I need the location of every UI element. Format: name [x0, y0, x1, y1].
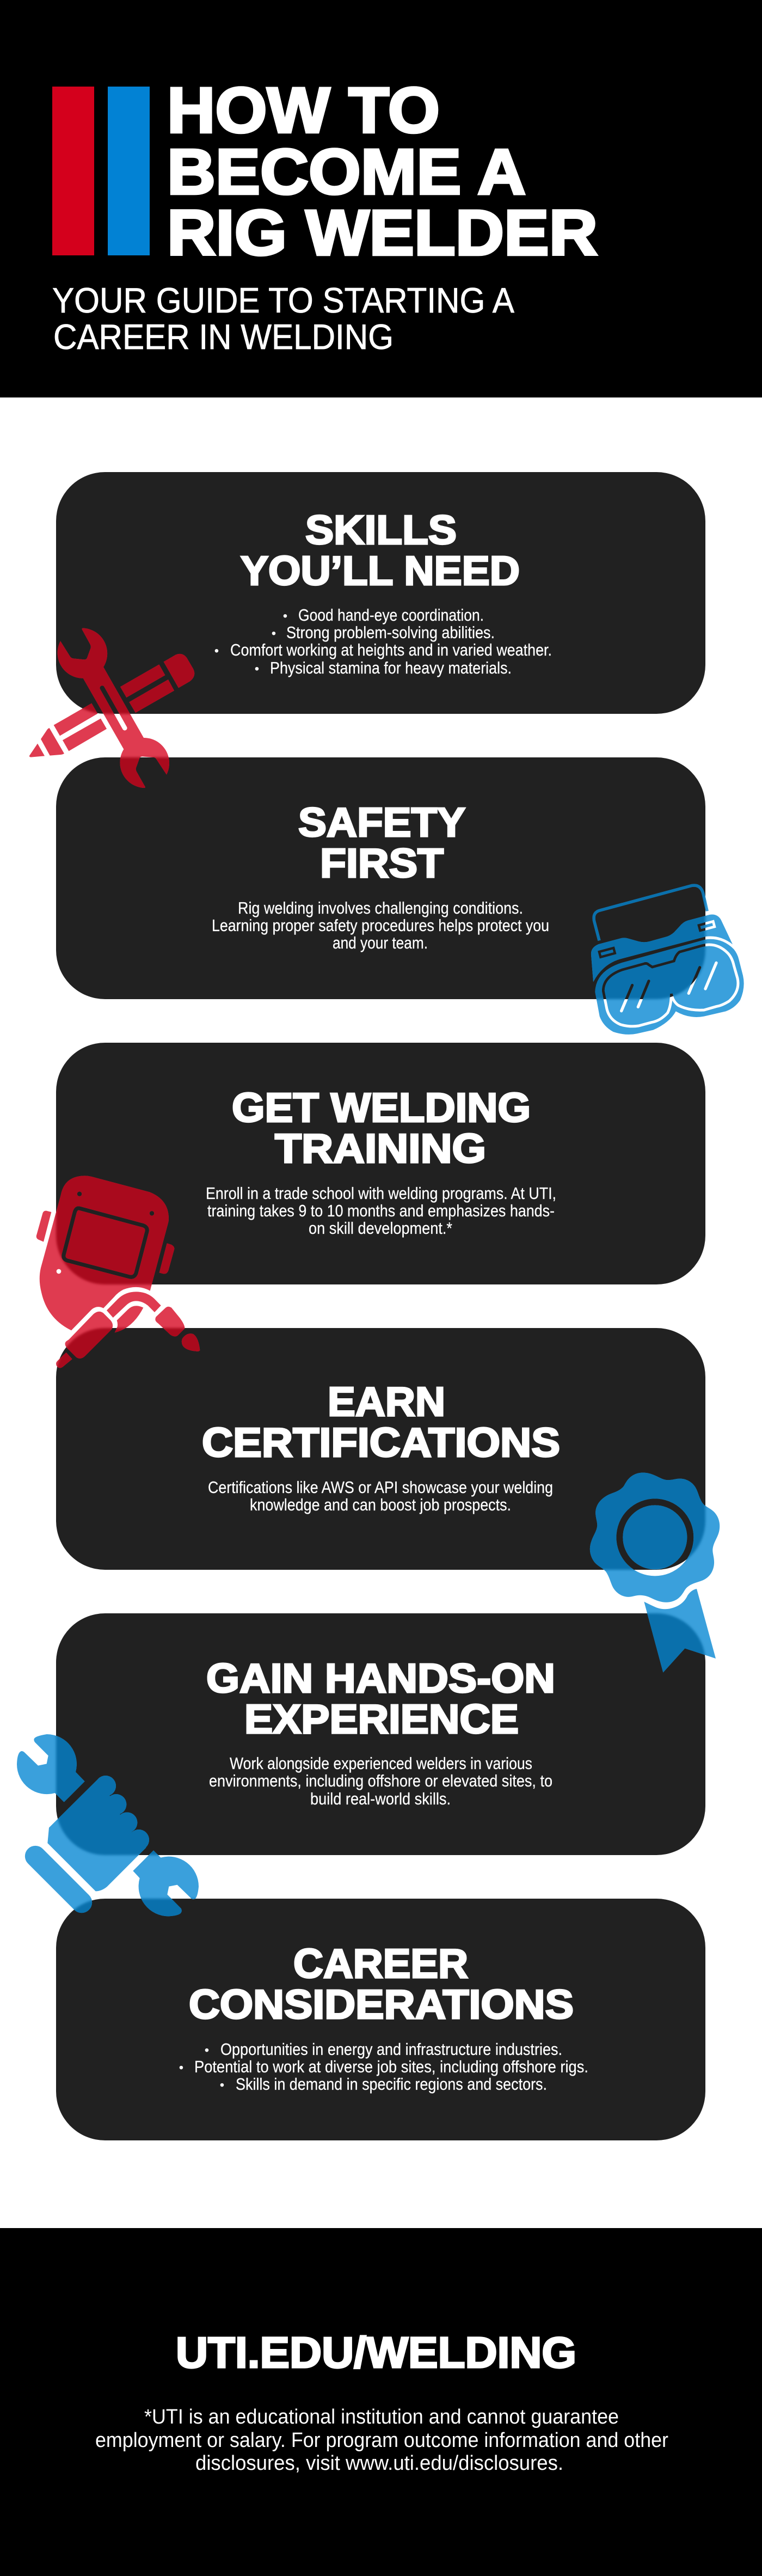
text: skills list: Comfort working at heights and in varied weather. [230, 640, 552, 659]
heading: safety: SAFETY [298, 799, 465, 845]
icon: wrench and pencil [29, 628, 194, 788]
footer panel [0, 2228, 762, 2576]
heading: skills [241, 507, 520, 593]
icon: hand holding wrench [17, 1734, 199, 1916]
heading: experience: GAIN HANDS-ON [206, 1655, 555, 1701]
heading: skills: SKILLS [305, 507, 457, 553]
heading: experience: EXPERIENCE [244, 1696, 519, 1742]
text: career list: Opportunities in energy and infrastructure industries. [220, 2040, 562, 2059]
text: skills list: Physical stamina for heavy materials. [270, 658, 512, 677]
text: career list: Potential to work at diverse job sites, including offshore rigs. [194, 2057, 588, 2076]
text: skills list: • [283, 609, 287, 623]
icon: certification ribbon [590, 1473, 720, 1673]
title: HOW TO [167, 75, 440, 146]
text: certifications body: knowledge and can boost job prospects. [250, 1495, 511, 1514]
heading: safety: FIRST [320, 840, 444, 886]
text: safety body [212, 898, 549, 952]
header panel [0, 0, 762, 397]
subtitle: CAREER IN WELDING [53, 317, 394, 357]
heading: certifications: CERTIFICATIONS [202, 1419, 560, 1465]
text: safety body: Rig welding involves challenging conditions. [238, 898, 523, 917]
panel: earn certifications [56, 1328, 705, 1570]
icon: blue stripe [108, 87, 150, 255]
text: career list: • [220, 2078, 224, 2092]
text: training body [206, 1184, 556, 1238]
title [167, 75, 598, 269]
text: career list: • [179, 2060, 183, 2075]
panel: safety first [56, 757, 705, 999]
text: experience body: Work alongside experienced welders in various [230, 1754, 532, 1773]
footer disclaimer: employment or salary. For program outcome information and other [95, 2429, 668, 2452]
heading: safety [298, 799, 465, 886]
panel: skills you'll need [56, 472, 705, 714]
text: safety body: and your team. [333, 933, 428, 952]
heading: training: GET WELDING [232, 1085, 531, 1130]
title: BECOME A [167, 136, 526, 208]
text: career list: Skills in demand in specific regions and sectors. [236, 2075, 547, 2094]
text: safety body: Learning proper safety procedures helps protect you [212, 916, 549, 935]
heading: career [189, 1941, 574, 2027]
heading: training: TRAINING [275, 1125, 486, 1171]
heading: skills: YOU’LL NEED [241, 548, 520, 593]
text: career list: • [205, 2043, 209, 2058]
text: skills list: • [214, 644, 219, 658]
text: training body: on skill development.* [309, 1219, 452, 1238]
text: experience body: environments, including offshore or elevated sites, to [209, 1771, 552, 1790]
text: experience body: build real-world skills. [310, 1789, 451, 1808]
panel: career considerations [56, 1899, 705, 2140]
footer disclaimer [95, 2406, 668, 2475]
icon: red stripe [52, 87, 94, 255]
heading: career: CONSIDERATIONS [189, 1981, 574, 2027]
subtitle: YOUR GUIDE TO STARTING A [52, 280, 515, 320]
text: certifications body: Certifications like AWS or API showcase your welding [208, 1478, 553, 1497]
panel: gain hands-on experience [56, 1613, 705, 1855]
footer disclaimer: disclosures, visit www.uti.edu/disclosures. [195, 2452, 563, 2475]
heading: training [232, 1085, 531, 1171]
text: experience body [209, 1754, 552, 1808]
text: skills list: Strong problem-solving abilities. [286, 623, 495, 642]
footer url heading: UTI.EDU/WELDING [176, 2328, 576, 2377]
icon: safety goggles [591, 885, 744, 1035]
text: skills list [214, 605, 552, 677]
text: training body: training takes 9 to 10 months and emphasizes hands- [207, 1201, 555, 1220]
text: skills list: • [272, 626, 276, 641]
subtitle [52, 280, 515, 357]
icon: welding helmet and torch [36, 1176, 200, 1368]
heading: certifications: EARN [328, 1379, 445, 1424]
text: skills list: • [255, 662, 259, 676]
heading: career: CAREER [293, 1941, 468, 1986]
title: RIG WELDER [167, 197, 598, 269]
text: training body: Enroll in a trade school with welding programs. At UTI, [206, 1184, 556, 1203]
text: certifications body [208, 1478, 553, 1514]
panel: get welding training [56, 1043, 705, 1284]
heading: certifications [202, 1379, 560, 1465]
footer disclaimer: *UTI is an educational institution and cannot guarantee [144, 2406, 619, 2428]
text: skills list: Good hand-eye coordination. [298, 605, 484, 625]
text: career list [179, 2040, 588, 2094]
heading: experience [206, 1655, 555, 1742]
